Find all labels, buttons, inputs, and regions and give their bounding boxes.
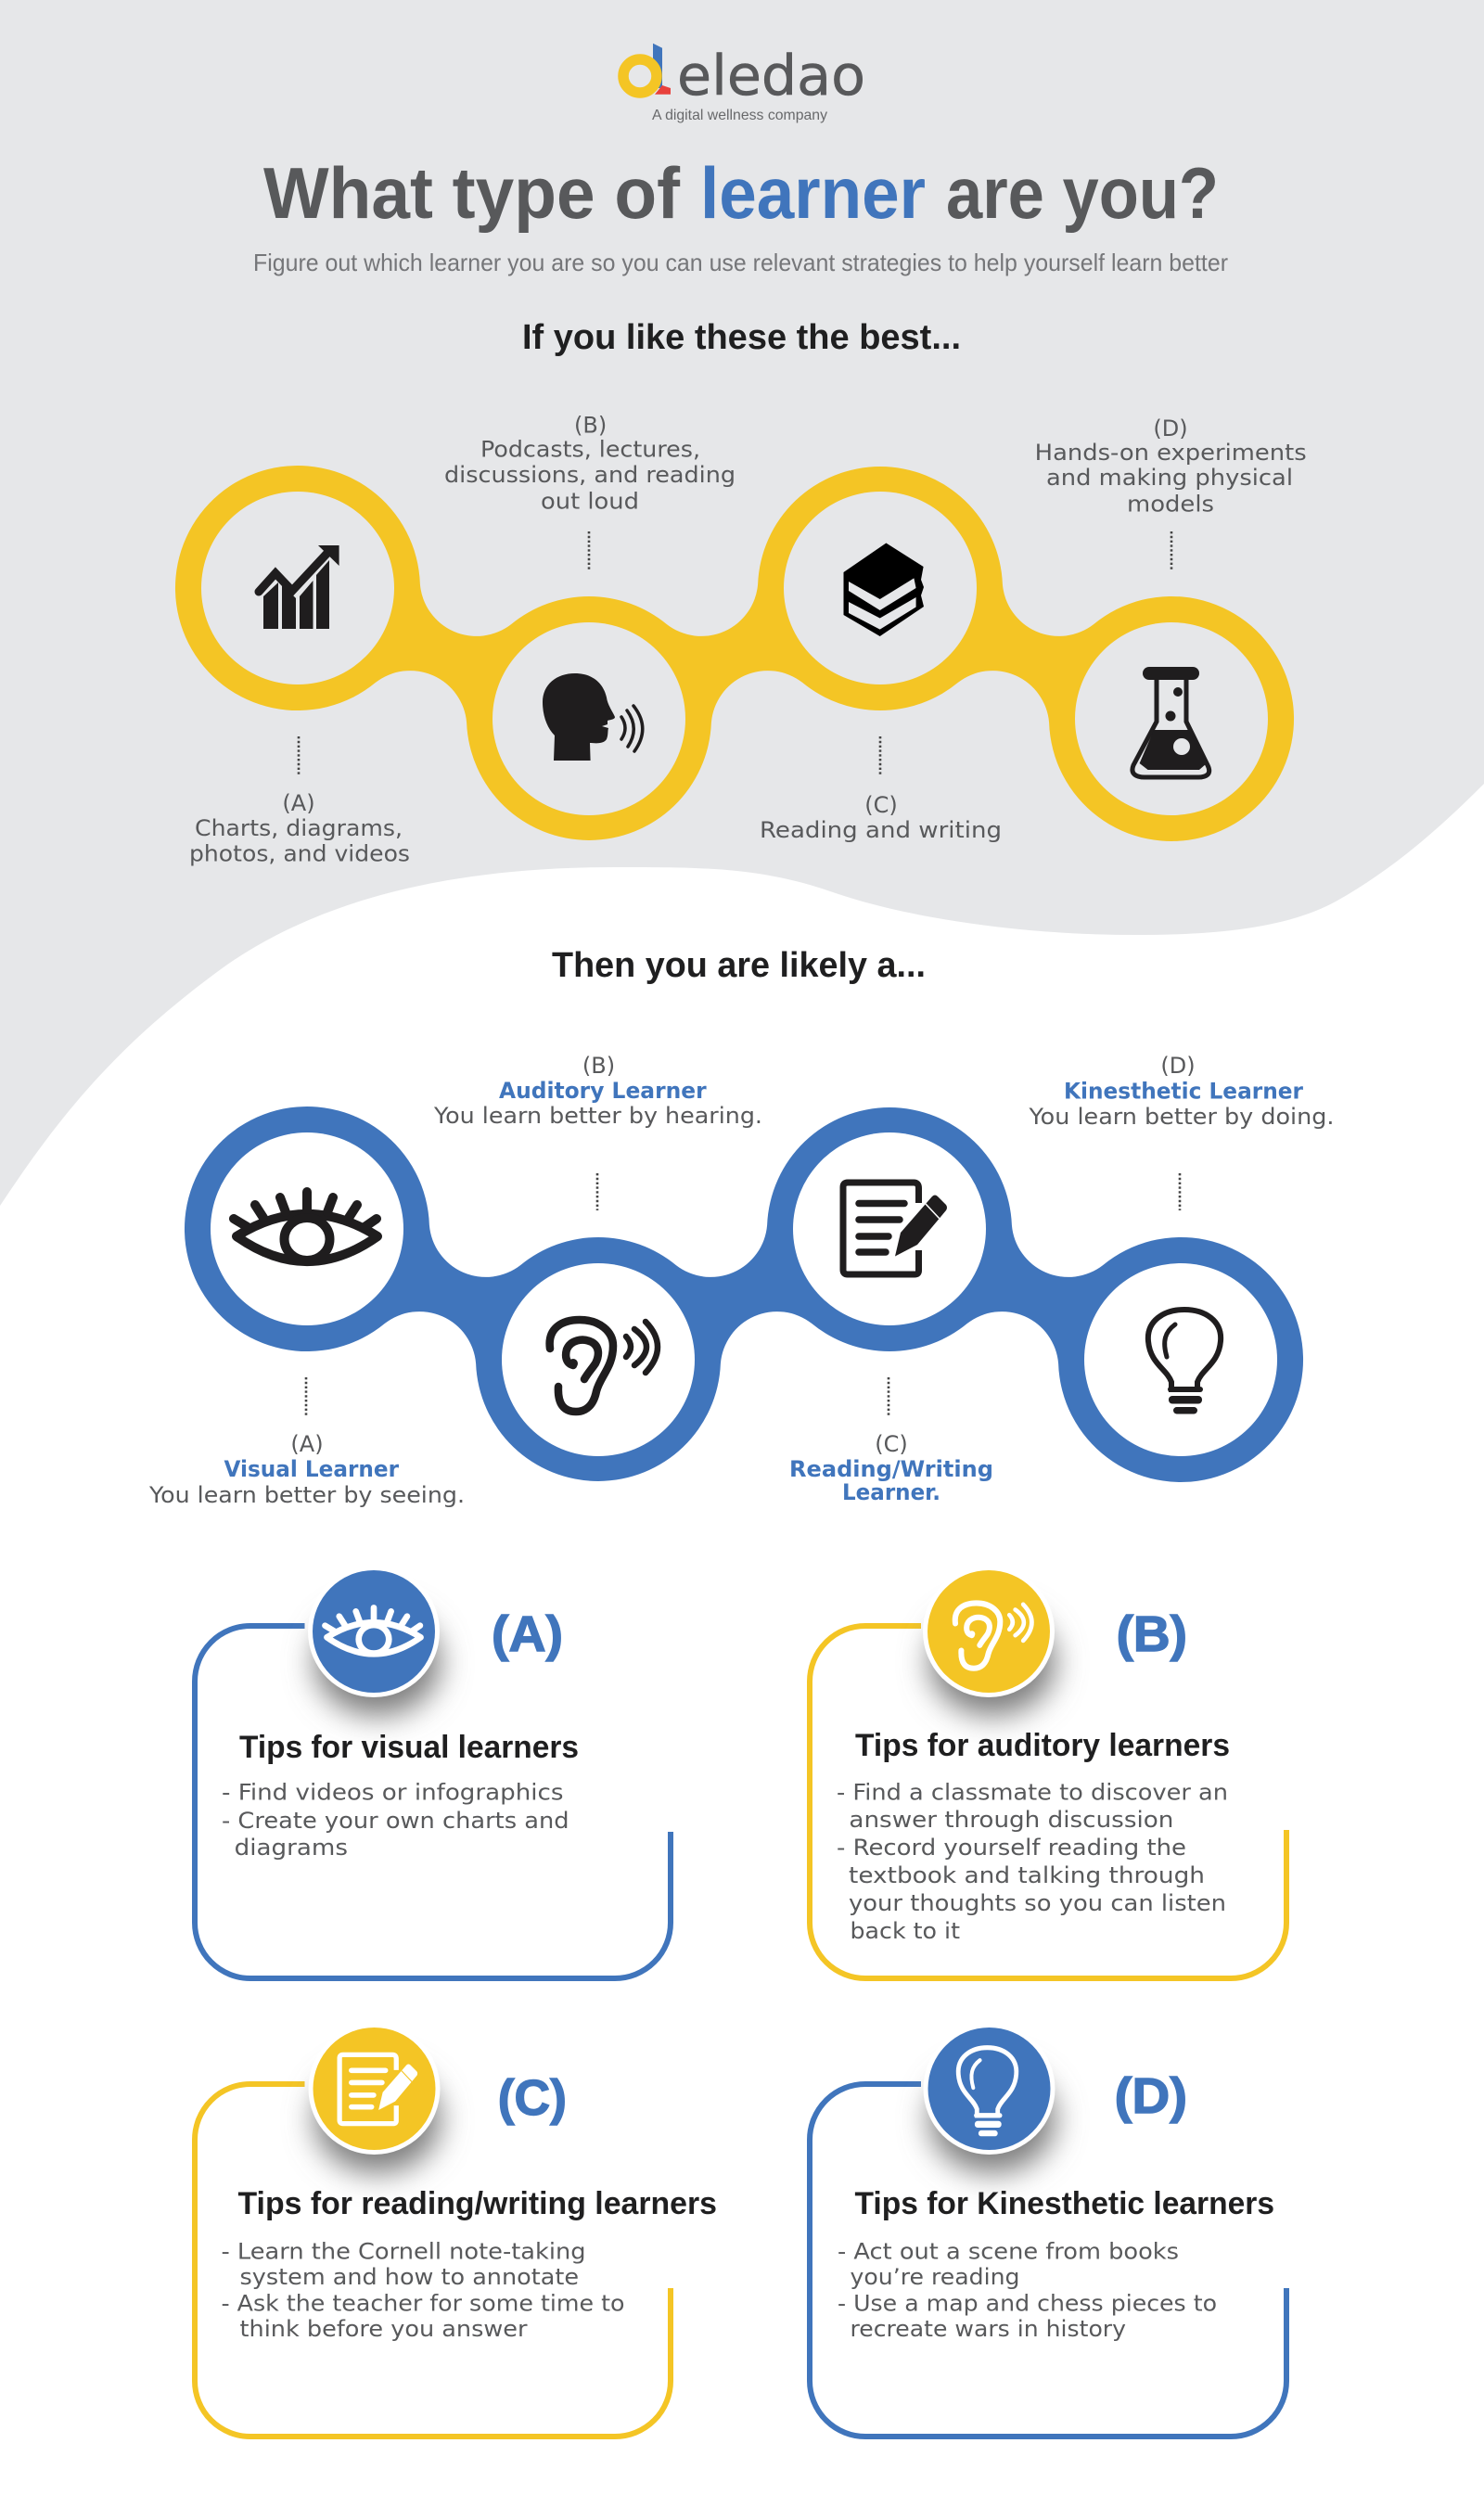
label A: visual learner: (A) — [290, 1431, 324, 1457]
label C: reading/writing learner: Learner. — [842, 1479, 940, 1505]
icon: speaking head — [543, 673, 643, 761]
label A: charts: (A) — [282, 790, 315, 816]
tips text B: - Find a classmate to discover an — [837, 1780, 1228, 1806]
label D: hands-on: (D) — [1153, 416, 1188, 441]
title: are you? — [946, 152, 1219, 234]
tips text B: answer through discussion — [849, 1807, 1173, 1833]
label B: podcasts: discussions, and reading — [444, 462, 736, 488]
panel: tips C reading/writing — [195, 2023, 717, 2437]
logo: A digital wellness company — [652, 108, 827, 123]
tips text B — [837, 1780, 1228, 1944]
label D: kinesthetic learner — [1028, 1053, 1334, 1210]
panel: tips B auditory — [810, 1566, 1286, 1978]
label B: podcasts: (B) — [574, 412, 607, 438]
label B: auditory learner — [433, 1053, 762, 1210]
label D: kinesthetic learner: You learn better by doing. — [1028, 1104, 1334, 1130]
icon: stacked books — [844, 544, 924, 636]
letter D: (D) — [1115, 2068, 1187, 2124]
icon: eye — [234, 1192, 377, 1261]
tips text C: system and how to annotate — [239, 2264, 579, 2290]
heading: tips reading/writing: Tips for reading/writing learners — [237, 2186, 717, 2221]
label B: podcasts — [444, 412, 736, 569]
label C: reading — [760, 736, 1002, 843]
label A: charts — [189, 736, 410, 867]
tips text A: - Create your own charts and — [222, 1808, 569, 1834]
tips text D: - Act out a scene from books — [838, 2239, 1179, 2265]
tips text B: your thoughts so you can listen — [849, 1890, 1226, 1916]
tips text B: - Record yourself reading the — [837, 1835, 1186, 1861]
label B: auditory learner: You learn better by hearing. — [433, 1103, 762, 1129]
label B: auditory learner: (B) — [582, 1053, 615, 1079]
icon: chart — [259, 545, 339, 629]
tips text C: - Ask the teacher for some time to — [221, 2291, 625, 2317]
label D: hands-on: Hands-on experiments — [1035, 440, 1307, 466]
icon: ear — [550, 1320, 658, 1412]
title: learner — [700, 152, 926, 234]
heading: tips auditory: Tips for auditory learners — [855, 1728, 1230, 1763]
icon: document and pencil — [843, 1183, 947, 1274]
label A: visual learner — [148, 1377, 465, 1508]
tips text A: - Find videos or infographics — [222, 1780, 564, 1806]
tips text B: back to it — [850, 1918, 960, 1944]
logo — [623, 44, 865, 123]
label A: charts: photos, and videos — [189, 841, 410, 867]
letter B: (B) — [1117, 1606, 1187, 1662]
icon: light bulb — [1148, 1310, 1221, 1414]
panel: tips D kinesthetic — [810, 2023, 1286, 2437]
label B: podcasts: out loud — [541, 489, 639, 515]
label C: reading/writing learner — [789, 1377, 993, 1505]
tips text B: textbook and talking through — [849, 1862, 1205, 1888]
label C: reading/writing learner: Reading/Writing — [789, 1456, 993, 1482]
label A: visual learner: You learn better by seeing. — [148, 1482, 465, 1508]
label B: podcasts: Podcasts, lectures, — [480, 436, 700, 462]
icon: bulb white — [958, 2048, 1017, 2136]
tips text D: recreate wars in history — [850, 2316, 1126, 2342]
label D: kinesthetic learner: Kinesthetic Learner — [1064, 1078, 1303, 1104]
tips text D — [838, 2239, 1217, 2342]
icon: ear white — [955, 1603, 1031, 1669]
tips text C: - Learn the Cornell note-taking — [221, 2239, 586, 2265]
heading: then you are: Then you are likely a... — [552, 946, 926, 985]
label A: charts: Charts, diagrams, — [195, 815, 403, 841]
label D: hands-on: and making physical — [1046, 465, 1293, 491]
label B: auditory learner: Auditory Learner — [499, 1078, 707, 1104]
background panel: white wave area — [0, 784, 1484, 2520]
label C: reading: Reading and writing — [760, 817, 1002, 843]
tips text C — [221, 2239, 625, 2342]
panel: tips A visual — [195, 1566, 671, 1978]
title — [263, 152, 1219, 234]
chain: blue learner types — [185, 1106, 1303, 1482]
tips text A — [222, 1780, 569, 1861]
tips text D: - Use a map and chess pieces to — [838, 2291, 1217, 2317]
heading: tips kinesthetic: Tips for Kinesthetic learners — [855, 2186, 1274, 2221]
icon: eye white — [325, 1607, 421, 1654]
heading: tips visual: Tips for visual learners — [239, 1730, 579, 1765]
chain: yellow preferences — [175, 466, 1294, 841]
letter A: (A) — [492, 1606, 563, 1662]
label D: hands-on — [1035, 416, 1307, 569]
tips text A: diagrams — [235, 1835, 348, 1861]
label C: reading: (C) — [864, 792, 898, 818]
icon: document white — [339, 2054, 417, 2124]
label D: hands-on: models — [1127, 492, 1214, 518]
label C: reading/writing learner: (C) — [875, 1431, 908, 1457]
tips text C: think before you answer — [239, 2316, 528, 2342]
label D: kinesthetic learner: (D) — [1160, 1053, 1196, 1079]
subtitle: Figure out which learner you are so you can use relevant strategies to help yourself learn better — [253, 249, 1228, 276]
heading: if you like: If you like these the best... — [522, 318, 961, 357]
tips text D: you’re reading — [850, 2264, 1020, 2290]
logo: eledao — [677, 44, 865, 109]
title: What type of — [263, 152, 681, 234]
icon: flask — [1132, 667, 1209, 777]
label A: visual learner: Visual Learner — [224, 1456, 399, 1482]
letter C: (C) — [498, 2070, 567, 2126]
